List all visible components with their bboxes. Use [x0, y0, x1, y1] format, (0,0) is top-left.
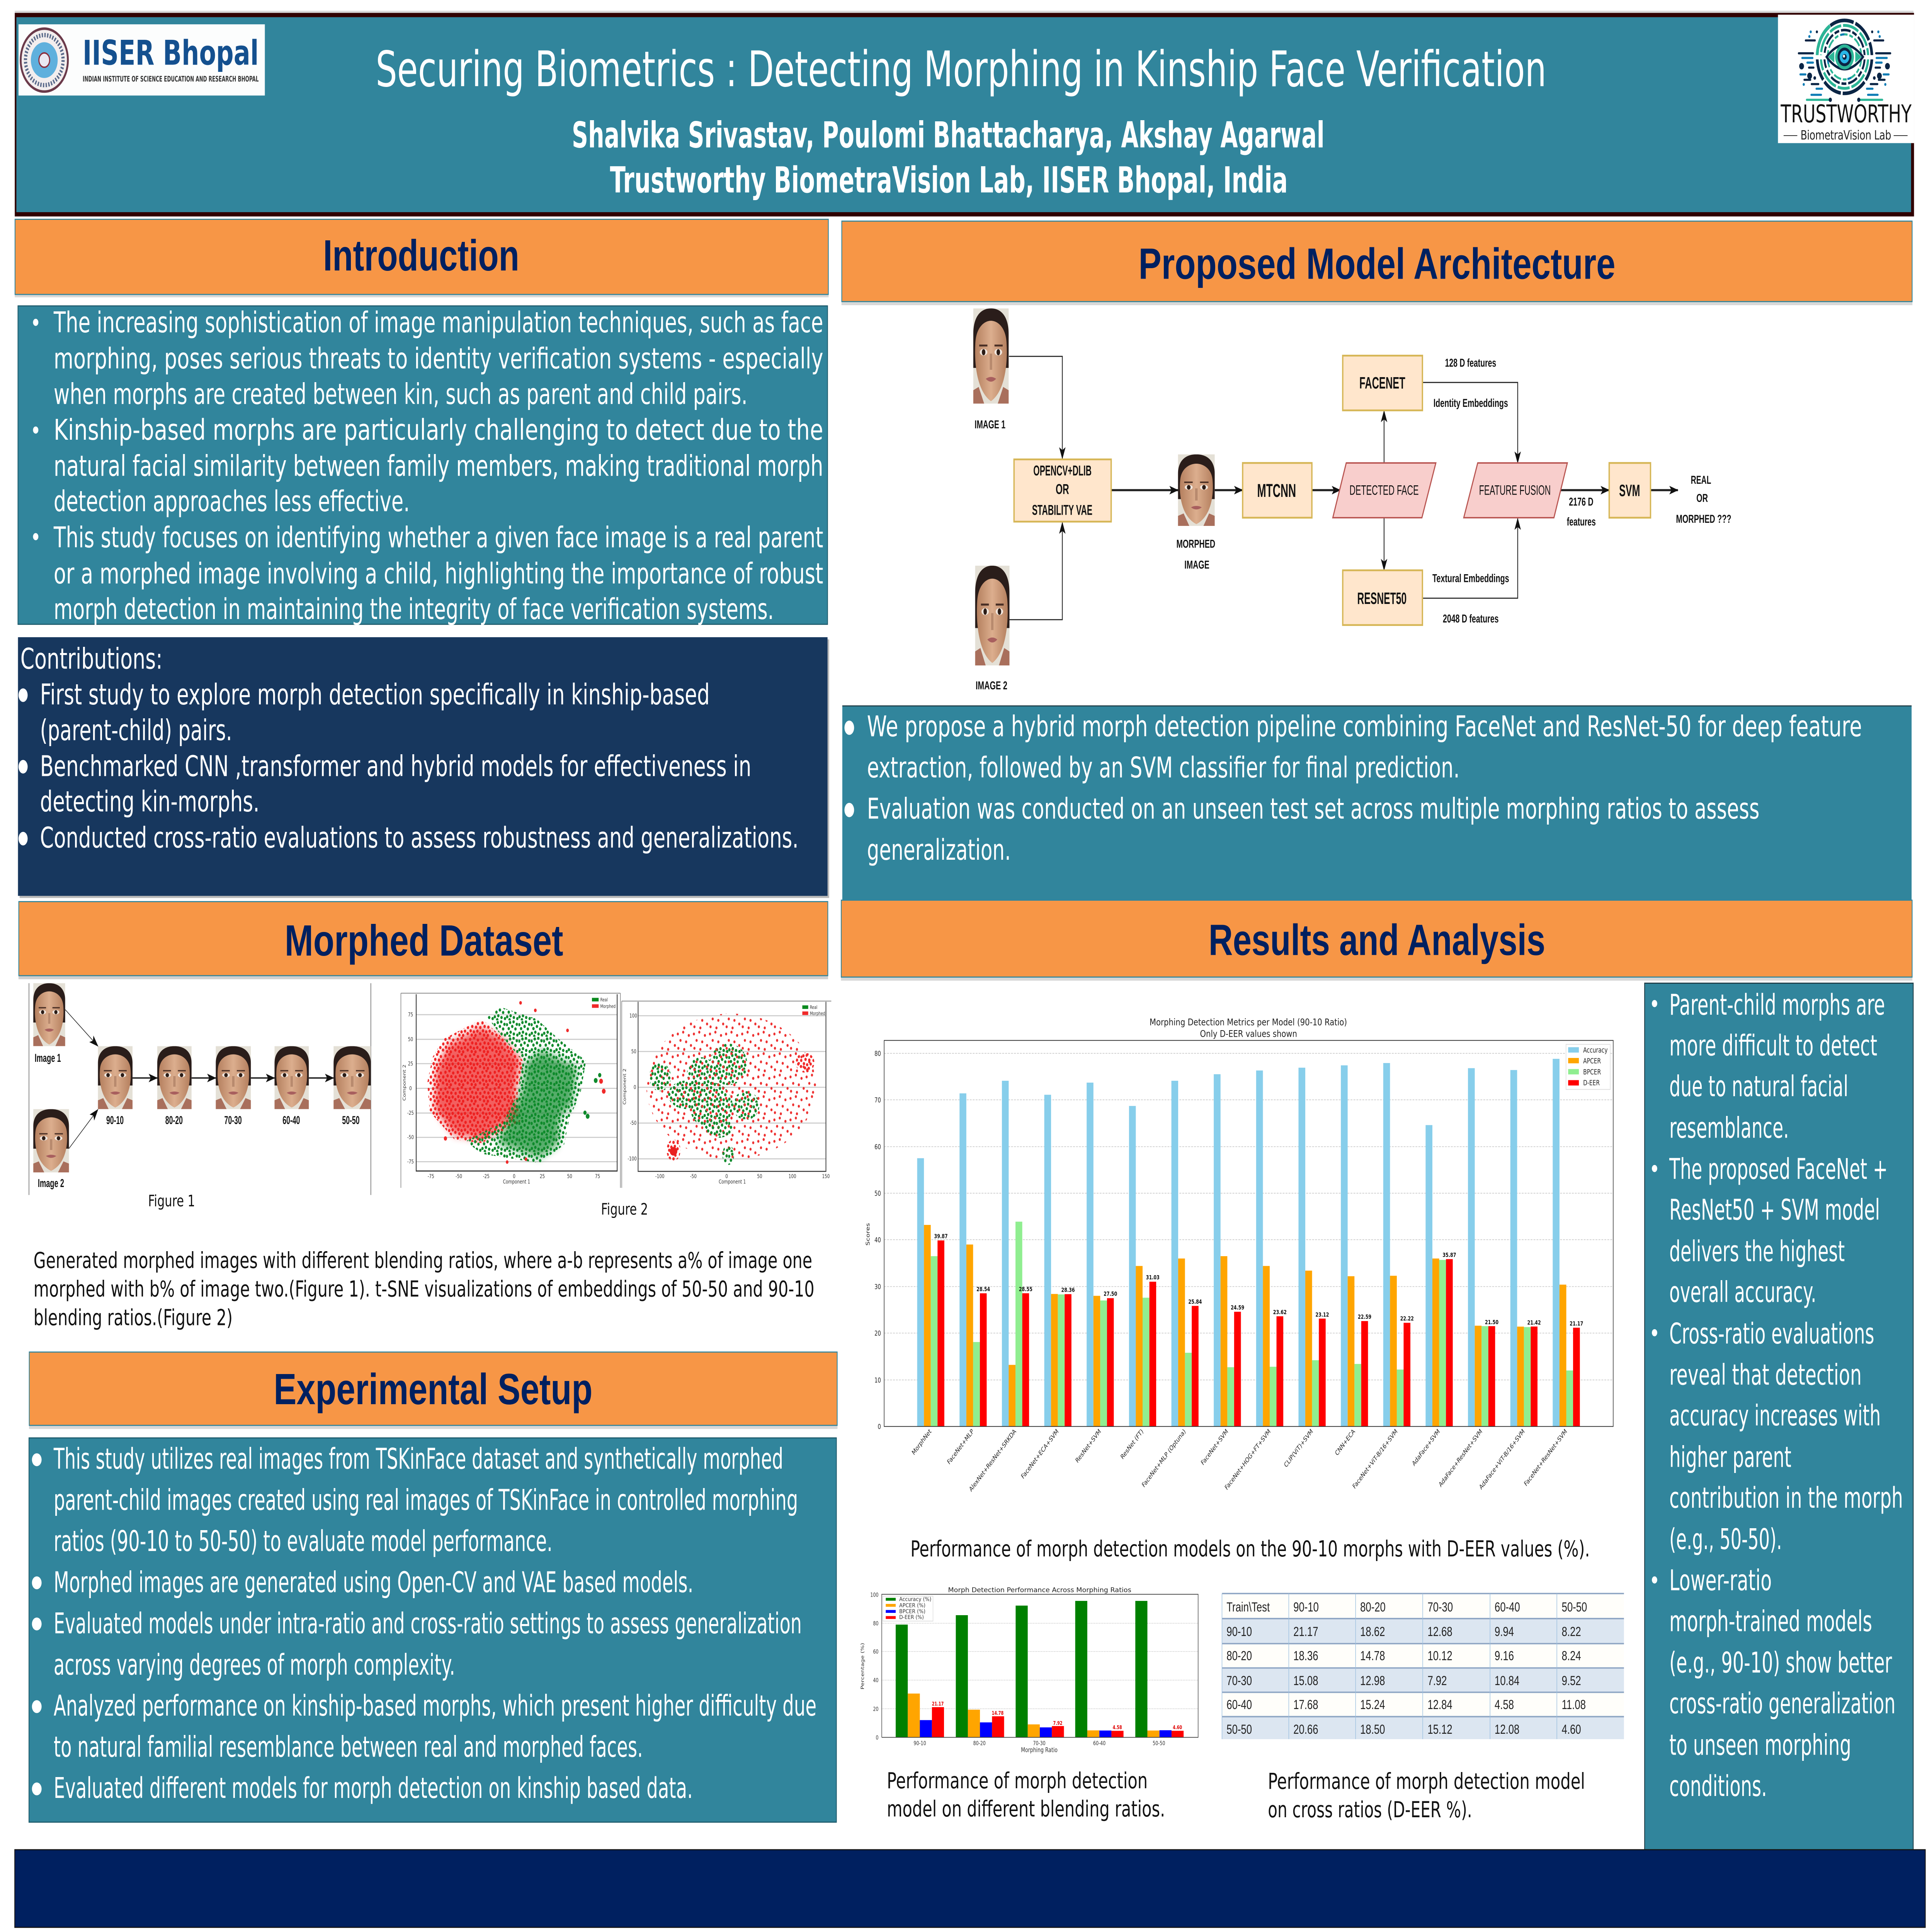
blended faces: [98, 1046, 371, 1109]
value labels: 4.60: [1173, 1725, 1182, 1730]
caption: dataset description: blending ratios.(Figure 2): [34, 1304, 233, 1330]
table cells: 9.16: [1495, 1649, 1514, 1663]
table cells: 50-50: [1226, 1723, 1252, 1737]
axis ticks and titles: 25: [408, 1061, 413, 1067]
panel: results takeaways: (e.g., 90-10) show better: [1669, 1646, 1892, 1680]
table cells: 12.68: [1427, 1625, 1452, 1639]
section heading: Morphed Dataset: Morphed Dataset: [285, 917, 563, 965]
caption: main chart: Performance of morph detection models on the 90-10 morphs with D-EER values (%).: [910, 1536, 1590, 1561]
intro lines: morph detection in maintaining the integrity of face verification systems.: [54, 593, 774, 626]
panel: experimental setup text: This study utilizes real images from TSKinFace dataset and synthetically morphed: [53, 1442, 783, 1476]
D-EER value labels: 22.59: [1358, 1314, 1371, 1320]
table cells: 60-40: [1495, 1600, 1520, 1614]
axis ticks and titles: -75: [407, 1159, 414, 1165]
axis labels: 80: [873, 1621, 879, 1627]
axis ticks and titles: -50: [690, 1173, 697, 1179]
axis ticks and titles: 100: [789, 1173, 796, 1179]
intro lines: or a morphed image involving a child, highlighting the importance of robust: [54, 557, 823, 590]
table cells: 10.12: [1427, 1649, 1452, 1663]
x axis model labels: CNN+ECA: [1334, 1427, 1356, 1457]
table cells: 17.68: [1293, 1698, 1318, 1712]
D-EER value labels: 35.87: [1442, 1252, 1456, 1259]
axis labels: 50-50: [1153, 1740, 1165, 1747]
diagram labels: STABILITY VAE: [1032, 502, 1092, 518]
x axis model labels: FaceNet+HOG+FT+SVM: [1224, 1427, 1272, 1492]
panel: results takeaways: Cross-ratio evaluations: [1669, 1317, 1874, 1350]
D-EER value labels: [934, 1233, 1583, 1327]
y axis labels: 10: [874, 1376, 881, 1384]
axis ticks and titles: 50: [567, 1173, 572, 1179]
value labels: 7.92: [1053, 1720, 1062, 1726]
table cells: 80-20: [1226, 1649, 1252, 1663]
diagram labels: RESNET50: [1357, 589, 1406, 607]
red scatter: [646, 1014, 816, 1161]
axis labels: 80-20: [973, 1740, 986, 1747]
legend: BPCER: [1583, 1068, 1601, 1076]
y axis labels: 70: [874, 1096, 881, 1104]
table cells: Train\Test: [1226, 1600, 1270, 1614]
figure 2: t-SNE 90-10: [622, 1001, 831, 1188]
authors: Shalvika Srivastav, Poulomi Bhattacharya, Akshay Agarwal: [572, 115, 1325, 156]
axis ticks and titles: [402, 1012, 600, 1185]
axis ticks and titles: 50: [631, 1048, 636, 1054]
legend: Real: [810, 1005, 817, 1010]
table cells: 60-40: [1226, 1698, 1252, 1712]
table cells: 8.22: [1562, 1625, 1581, 1639]
diagram labels: OR: [1056, 481, 1069, 497]
y axis labels: 60: [874, 1143, 881, 1151]
panel: results takeaways: conditions.: [1669, 1770, 1767, 1803]
y axis labels: 50: [874, 1190, 881, 1197]
panel: results takeaways: [1645, 983, 1913, 1850]
D-EER value labels: 31.03: [1146, 1275, 1160, 1281]
caption: dataset description: Generated morphed images with different blending ratios, where a-b represents a% of image one: [34, 1247, 812, 1273]
x axis model labels: FaceNet+ECA+SVM: [1020, 1427, 1060, 1481]
axis ticks and titles: 75: [595, 1173, 600, 1179]
diagram labels: 128 D features: [1445, 356, 1496, 369]
panel: experimental setup text: Evaluated models under intra-ratio and cross-ratio settings to assess generalization: [54, 1607, 802, 1640]
panel: architecture description: We propose a hybrid morph detection pipeline combining FaceNet and ResNet-50 for deep feature: [867, 710, 1862, 743]
table cells: 50-50: [1562, 1600, 1587, 1614]
panel: experimental setup text: across varying degrees of morph complexity.: [54, 1648, 455, 1682]
logo: IISER Bhopal: IISER Bhopal: [83, 34, 259, 73]
section heading: Experimental Setup: [29, 1352, 837, 1429]
axis ticks and titles: 0: [409, 1085, 412, 1092]
legend: [883, 1596, 933, 1621]
caption: cross ratio table: Performance of morph detection model: [1268, 1768, 1585, 1794]
legend: D-EER (%): [899, 1614, 924, 1620]
table cells: [1226, 1600, 1587, 1737]
diagram labels: [975, 356, 1731, 692]
gridlines: [416, 1015, 617, 1162]
legend: Morphed: [810, 1011, 825, 1016]
panel: contributions: Conducted cross-ratio evaluations to assess robustness and generalizations.: [40, 821, 799, 855]
panel: experimental setup text: Analyzed performance on kinship-based morphs, which present higher difficulty due: [54, 1689, 816, 1723]
section heading: Introduction: Introduction: [323, 231, 519, 280]
diagram labels: REAL: [1691, 473, 1711, 486]
figure 1: morph sequence: [29, 983, 371, 1195]
intro lines: when morphs are created between kin, such as parent and child pairs.: [54, 378, 748, 411]
table cells: 8.24: [1562, 1649, 1581, 1663]
D-EER value labels: 39.87: [934, 1233, 948, 1240]
bar chart: blending ratios: [860, 1587, 1198, 1754]
diagram labels: IMAGE 2: [976, 679, 1007, 692]
table cells: 11.08: [1562, 1698, 1586, 1712]
figure labels: Image 2: [38, 1177, 64, 1190]
table cells: 12.98: [1360, 1674, 1385, 1688]
figure labels: 60-40: [282, 1114, 300, 1127]
connectors: [1009, 356, 1678, 620]
axis ticks and titles: -50: [630, 1120, 636, 1126]
panel: results takeaways: higher parent: [1669, 1440, 1791, 1474]
overlapping red points: [682, 1048, 762, 1127]
input face images: [973, 308, 1215, 665]
axis ticks and titles: 0: [725, 1173, 728, 1179]
axis ticks and titles: -100: [655, 1173, 664, 1179]
figure labels: Image 1: [35, 1051, 61, 1065]
x axis model labels: FaceNet+MLP: [946, 1427, 975, 1466]
figure labels: 70-30: [224, 1114, 242, 1127]
chart title: Only D-EER values shown: [1200, 1029, 1297, 1039]
diagram labels: DETECTED FACE: [1349, 483, 1419, 498]
axis labels: 60-40: [1093, 1740, 1105, 1747]
intro lines: detection approaches less effective.: [54, 485, 410, 518]
diagram labels: IMAGE 1: [975, 418, 1005, 431]
diagram labels: features: [1567, 515, 1596, 528]
table cells: 12.08: [1495, 1723, 1519, 1737]
x axis model labels: AdaFace+ResNet+SVM: [1438, 1427, 1483, 1489]
x axis model labels: AlexNet+ResNet+SRKDA: [968, 1427, 1017, 1493]
diagram labels: 2048 D features: [1443, 612, 1498, 625]
axis ticks and titles: -100: [628, 1156, 637, 1162]
x axis model labels: ResNet (FT): [1119, 1427, 1145, 1461]
diagram labels: SVM: [1619, 481, 1640, 500]
logo: IISER Bhopal: INDIAN INSTITUTE OF SCIENCE EDUCATION AND RESEARCH BHOPAL: [83, 75, 259, 84]
x axis model labels: CLIP(ViT)+SVM: [1283, 1427, 1314, 1469]
panel: experimental setup text: to natural familial resemblance between real and morphed faces.: [54, 1730, 643, 1764]
chart title: Morphing Detection Metrics per Model (90-10 Ratio): [1150, 1017, 1347, 1028]
y axis labels: 20: [874, 1330, 881, 1337]
panel: results takeaways: to unseen morphing: [1669, 1729, 1851, 1762]
table cells: 15.12: [1427, 1723, 1452, 1737]
axis labels: 40: [873, 1677, 879, 1684]
figure labels: 80-20: [165, 1114, 183, 1127]
red parallelograms: [1333, 463, 1567, 518]
panel: results takeaways: overall accuracy.: [1669, 1276, 1816, 1309]
y axis labels: [874, 1050, 881, 1431]
section heading: Experimental Setup: Experimental Setup: [274, 1366, 592, 1414]
panel: contributions: [18, 637, 829, 898]
header banner: [15, 11, 1914, 216]
axis ticks and titles: -75: [428, 1173, 434, 1179]
panel: experimental setup text: Evaluated different models for morph detection on kinship based data.: [54, 1772, 693, 1805]
panel: architecture description: generalization.: [867, 833, 1011, 867]
legend: [592, 997, 616, 1009]
axis ticks and titles: [622, 1013, 830, 1185]
axis ticks and titles: Component 2: [622, 1068, 627, 1105]
logo: Trustworthy BiometraVision Lab: TRUSTWORTHY: [1781, 100, 1912, 129]
D-EER value labels: 28.54: [976, 1286, 990, 1293]
table cells: 15.08: [1293, 1674, 1318, 1688]
panel: experimental setup text: [29, 1438, 837, 1822]
axis labels: 0: [876, 1735, 879, 1741]
x axis model labels: ResNet+SVM: [1074, 1427, 1102, 1464]
axis ticks and titles: -25: [483, 1173, 490, 1179]
panel: results takeaways: Lower-ratio: [1669, 1564, 1772, 1597]
panel: results takeaways: resemblance.: [1669, 1112, 1789, 1145]
legend: Accuracy (%): [899, 1596, 931, 1602]
section heading: Results and Analysis: Results and Analysis: [1209, 916, 1545, 964]
figure labels: [35, 1051, 360, 1190]
panel: results takeaways: The proposed FaceNet +: [1669, 1153, 1888, 1186]
intro lines: This study focuses on identifying whether a given face image is a real parent: [53, 521, 823, 554]
panel: architecture description: Evaluation was conducted on an unseen test set across multiple morphing ratios to assess: [867, 793, 1759, 826]
diagram labels: OR: [1696, 492, 1708, 505]
table cells: 80-20: [1360, 1600, 1386, 1614]
panel: architecture description: [842, 706, 1912, 900]
panel: contributions: Benchmarked CNN ,transformer and hybrid models for effectiveness in: [40, 750, 751, 783]
table cells: 18.62: [1360, 1625, 1385, 1639]
caption: dataset description: morphed with b% of image two.(Figure 1). t-SNE visualizations of embeddings of 50-50 and 90-10: [34, 1276, 815, 1302]
intro lines: morphing, poses serious threats to identity verification systems - especially: [54, 342, 823, 376]
red cluster: [427, 1019, 523, 1143]
caption: blending ratios chart: [887, 1768, 1165, 1822]
axis ticks and titles: 100: [629, 1013, 637, 1019]
caption: Figure 1: Figure 1: [148, 1192, 195, 1210]
legend: Accuracy: [1583, 1046, 1608, 1054]
axis ticks and titles: -25: [407, 1110, 414, 1116]
bar chart: metrics per model: Scores: [865, 1223, 871, 1246]
table cells: 14.78: [1360, 1649, 1385, 1663]
table cells: 20.66: [1293, 1723, 1318, 1737]
D-EER value labels: 21.42: [1527, 1320, 1541, 1326]
bar chart: blending ratios: Morph Detection Performance Across Morphing Ratios: [948, 1587, 1131, 1594]
logo: IISER Bhopal: [19, 24, 265, 95]
diagram labels: FACENET: [1359, 374, 1405, 392]
legend: APCER (%): [899, 1602, 925, 1609]
green cluster: [466, 1007, 586, 1163]
diagram labels: 2176 D: [1569, 495, 1594, 508]
table cells: 18.50: [1360, 1723, 1385, 1737]
diagram labels: Textural Embeddings: [1432, 571, 1509, 585]
panel: results takeaways: accuracy increases with: [1669, 1399, 1881, 1432]
table cells: 12.84: [1427, 1698, 1452, 1712]
D-EER value labels: 21.17: [1570, 1321, 1583, 1327]
table cells: 15.24: [1360, 1698, 1385, 1712]
source faces: [33, 983, 69, 1172]
D-EER value labels: 22.22: [1400, 1316, 1414, 1322]
section heading: Proposed Model Architecture: [842, 221, 1912, 305]
legend: APCER: [1583, 1057, 1601, 1065]
panel: results takeaways: more difficult to detect: [1669, 1029, 1877, 1063]
panel: contributions: Contributions:: [20, 643, 163, 676]
table cells: 10.84: [1495, 1674, 1519, 1688]
logo: Trustworthy BiometraVision Lab: BiometraVision Lab: [1801, 128, 1891, 143]
D-EER value labels: 24.59: [1231, 1304, 1244, 1311]
D-EER value labels: 25.84: [1188, 1299, 1202, 1306]
axis ticks and titles: 0: [634, 1084, 636, 1090]
x axis model labels: AdaFace+SVM: [1411, 1427, 1441, 1468]
bullets: [33, 319, 38, 540]
intro lines: Kinship-based morphs are particularly challenging to detect due to the: [54, 413, 823, 447]
panel: contributions: detecting kin-morphs.: [40, 785, 260, 818]
D-EER value labels: 23.12: [1315, 1312, 1329, 1318]
axis ticks and titles: 50: [408, 1036, 413, 1043]
panel: experimental setup text: ratios (90-10 to 50-50) to evaluate model performance.: [54, 1525, 553, 1558]
y axis labels: 0: [878, 1423, 881, 1431]
bars: [896, 1601, 1184, 1737]
diagram labels: MTCNN: [1257, 480, 1296, 501]
panel: results takeaways: Parent-child morphs are: [1669, 988, 1885, 1022]
figure 2: t-SNE 50-50: [401, 993, 621, 1188]
legend: [802, 1005, 825, 1016]
panel: architecture description: extraction, followed by an SVM classifier for final prediction.: [867, 751, 1460, 784]
x axis model labels: FaceNet+SVM: [1200, 1427, 1230, 1467]
axis labels: 100: [870, 1592, 879, 1599]
D-EER value labels: 27.50: [1104, 1291, 1117, 1298]
figure labels: 90-10: [106, 1114, 124, 1127]
table cells: 70-30: [1427, 1600, 1453, 1614]
section heading: Morphed Dataset: [19, 901, 828, 979]
axis ticks and titles: 0: [513, 1173, 515, 1179]
D-EER value labels: 28.36: [1061, 1287, 1075, 1294]
intro lines: The increasing sophistication of image manipulation techniques, such as face: [53, 306, 823, 339]
architecture diagram: [973, 308, 1731, 692]
intro lines: natural facial similarity between family members, making traditional morph: [54, 450, 823, 483]
bars: [917, 1059, 1580, 1427]
panel: results takeaways: due to natural facial: [1669, 1070, 1848, 1103]
title: Securing Biometrics : Detecting Morphing in Kinship Face Verification: [376, 41, 1546, 98]
caption: cross ratio table: [1268, 1768, 1585, 1822]
caption: blending ratios chart: model on different blending ratios.: [887, 1796, 1165, 1822]
panel: results takeaways: reveal that detection: [1669, 1358, 1862, 1391]
axis ticks and titles: Component 2: [402, 1065, 407, 1101]
green scatter: [650, 1044, 759, 1165]
panel: experimental setup text: parent-child images created using real images of TSKinFace in controlled morphing: [54, 1484, 798, 1517]
diagram labels: OPENCV+DLIB: [1033, 463, 1092, 478]
axis ticks and titles: 50: [757, 1173, 762, 1179]
arrows: [65, 1010, 333, 1148]
caption: cross ratio table: on cross ratios (D-EER %).: [1268, 1797, 1472, 1822]
axis ticks and titles: 75: [408, 1012, 413, 1018]
x axis model labels: MorphNet: [911, 1427, 933, 1457]
section heading: Results and Analysis: [841, 900, 1912, 981]
legend: [1566, 1044, 1610, 1089]
axis labels: 20: [873, 1706, 879, 1713]
value labels: 4.58: [1113, 1725, 1122, 1730]
axis ticks and titles: 25: [540, 1173, 545, 1179]
y axis labels: 80: [874, 1050, 881, 1058]
axis ticks and titles: -50: [456, 1173, 462, 1179]
intro lines: [53, 306, 823, 626]
legend: Real: [600, 997, 608, 1003]
caption: dataset description: [34, 1247, 815, 1330]
logo: Trustworthy BiometraVision Lab: [1778, 15, 1914, 143]
diagram labels: MORPHED: [1176, 537, 1215, 550]
axis ticks and titles: Component 1: [503, 1179, 530, 1185]
x axis model labels: FaceNet+ViT-B/16+SVM: [1352, 1427, 1399, 1490]
value labels: [932, 1701, 1182, 1730]
table cells: 4.58: [1495, 1698, 1514, 1712]
x axis model labels: AdaFace+ViT-B/16+SVM: [1478, 1427, 1526, 1491]
table: cross-ratio D-EER: [1222, 1594, 1624, 1739]
value labels: 14.78: [992, 1710, 1003, 1716]
table cells: 9.94: [1495, 1625, 1514, 1639]
legend: Morphed: [600, 1003, 616, 1009]
axis labels: 70-30: [1033, 1740, 1046, 1747]
x axis model labels: FaceNet+MLP (Optuna): [1141, 1427, 1187, 1489]
D-EER value labels: 23.62: [1273, 1309, 1287, 1316]
panel: introduction text: [18, 306, 828, 626]
table cells: 70-30: [1226, 1674, 1252, 1688]
axis ticks and titles: Component 1: [719, 1179, 746, 1185]
panel: contributions: (parent-child) pairs.: [40, 714, 232, 747]
caption: blending ratios chart: Performance of morph detection: [887, 1768, 1148, 1793]
axis labels: [860, 1592, 1165, 1754]
panel: experimental setup text: Morphed images are generated using Open-CV and VAE based models.: [54, 1566, 693, 1599]
axis labels: 60: [873, 1649, 879, 1655]
axis ticks and titles: -50: [407, 1134, 414, 1141]
table cells: 18.36: [1293, 1649, 1318, 1663]
panel: results takeaways: (e.g., 50-50).: [1669, 1523, 1782, 1556]
value labels: 21.17: [932, 1701, 944, 1707]
caption: Figure 2: Figure 2: [601, 1201, 648, 1219]
figure labels: 50-50: [342, 1114, 360, 1127]
legend: BPCER (%): [899, 1609, 925, 1614]
outlier points: [444, 1001, 605, 1164]
D-EER value labels: 21.50: [1485, 1319, 1498, 1326]
table cells: 7.92: [1427, 1674, 1447, 1688]
x axis model labels: FaceNet+ResNet+SVM: [1523, 1427, 1568, 1488]
bar chart: metrics per model: [865, 1017, 1613, 1493]
axis labels: Percentage (%): [860, 1643, 866, 1689]
section heading: Proposed Model Architecture: Proposed Model Architecture: [1139, 240, 1616, 288]
diagram labels: FEATURE FUSION: [1479, 483, 1551, 498]
legend: D-EER: [1583, 1078, 1600, 1087]
diagram labels: Identity Embeddings: [1434, 396, 1508, 410]
panel: results takeaways: delivers the highest: [1669, 1235, 1845, 1268]
D-EER value labels: 28.55: [1019, 1286, 1032, 1293]
orange process boxes: [1014, 355, 1651, 625]
table cells: 90-10: [1226, 1625, 1252, 1639]
chart title: [1150, 1017, 1347, 1039]
axis labels: 90-10: [913, 1740, 926, 1747]
table cells: 90-10: [1293, 1600, 1319, 1614]
table cells: 4.60: [1562, 1723, 1581, 1737]
table cells: 21.17: [1293, 1625, 1318, 1639]
axis ticks and titles: 150: [822, 1173, 830, 1179]
y axis labels: 30: [874, 1283, 881, 1291]
footer bar: [15, 1850, 1925, 1927]
diagram labels: MORPHED ???: [1676, 512, 1731, 526]
y axis labels: 40: [874, 1236, 881, 1244]
affiliation: Trustworthy BiometraVision Lab, IISER Bhopal, India: [610, 160, 1288, 201]
axis labels: Morphing Ratio: [1021, 1747, 1058, 1754]
table cells: 9.52: [1562, 1674, 1581, 1688]
panel: results takeaways: morph-trained models: [1669, 1605, 1872, 1638]
panel: contributions: First study to explore morph detection specifically in kinship-based: [40, 678, 710, 711]
section heading: Introduction: [15, 219, 828, 297]
x axis model labels: [911, 1427, 1568, 1493]
diagram labels: IMAGE: [1184, 558, 1209, 571]
panel: results takeaways: ResNet50 + SVM model: [1669, 1194, 1880, 1227]
